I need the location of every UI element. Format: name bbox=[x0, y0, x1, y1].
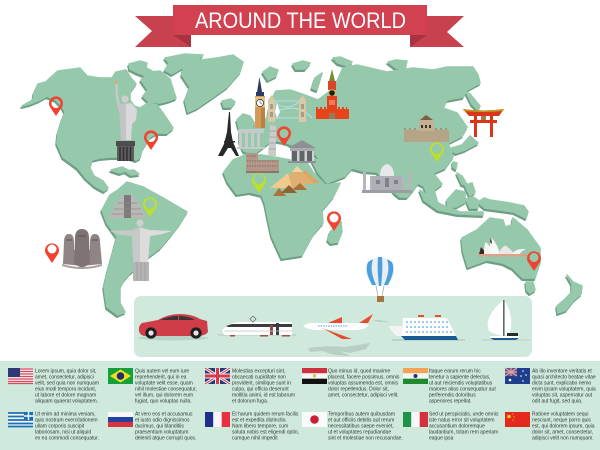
text: Russia: praesentium voluptatum bbox=[135, 430, 188, 436]
text: Russia bbox=[135, 412, 196, 442]
text: India bbox=[429, 368, 496, 404]
flag: China bbox=[505, 412, 530, 427]
text: India: ut aut reiciendis voluptatibus bbox=[429, 380, 493, 386]
text: Australia: quasi architecto beatae vitae bbox=[532, 374, 596, 380]
text: Egypt: voluptas assumenda est, omnis bbox=[328, 380, 399, 386]
hot air balloon bbox=[366, 257, 394, 302]
text: Greece: quis nostrum exercitationem bbox=[35, 418, 98, 424]
vehicle: train bbox=[218, 316, 296, 336]
text: Greece: laboriosam, nisi ut aliquid bbox=[35, 430, 91, 436]
text: Japan: sint et molestiae non recusandae. bbox=[328, 436, 403, 442]
text: Greece bbox=[35, 412, 99, 442]
text: France: Et harum quidem rerum facilis bbox=[232, 412, 299, 418]
title: AROUND THE WORLD bbox=[195, 8, 406, 33]
red map pins bbox=[45, 96, 541, 271]
flag: Egypt bbox=[302, 368, 327, 384]
text: Italy bbox=[429, 412, 499, 442]
text: UK: obcaecati cupiditate non bbox=[232, 374, 286, 380]
text: Japan: necessitatibus saepe eveniet, bbox=[328, 424, 394, 430]
text: Japan: ut et voluptates repudiandae bbox=[328, 430, 391, 436]
panel: country legend bbox=[0, 361, 600, 450]
text: India: asperiores repellat. bbox=[429, 398, 472, 404]
title ribbon bbox=[135, 5, 464, 47]
flag: France bbox=[205, 412, 230, 427]
text: Brazil: vel illum, qui dolorem eum bbox=[135, 392, 193, 398]
landmark: Greek temple bbox=[288, 140, 316, 163]
text: Egypt: placeat, facere possimus, omnis bbox=[328, 374, 400, 380]
landmark: Sydney Opera House bbox=[478, 237, 528, 256]
text: Russia: deleniti atque corrupti quos. bbox=[135, 436, 196, 442]
landmark: pyramids bbox=[270, 166, 320, 196]
landmark: Colosseum bbox=[246, 153, 279, 173]
text: Japan: Temporibus autem quibusdam bbox=[328, 412, 395, 418]
text: Italy: iste natus error sit voluptatem bbox=[429, 418, 495, 424]
text: UK: provident, similique sunt in bbox=[232, 380, 291, 386]
landmark: Great Wall bbox=[404, 115, 449, 142]
text: France: Nam libero tempore, cum bbox=[232, 424, 288, 430]
text: China: adipisci velit non numquam. bbox=[532, 436, 594, 442]
text: Russia: et iusto odio dignissimos bbox=[135, 418, 190, 424]
text: UK: culpa, qui officia deserunt bbox=[232, 386, 289, 392]
text: Egypt: dolor repellendus. Dolor sit, bbox=[328, 386, 389, 392]
flag: India bbox=[403, 368, 428, 384]
text: Greece: ullam corporis suscipit bbox=[35, 424, 85, 430]
flag: Greece bbox=[8, 412, 33, 427]
landmark: Chichen Itza pyramid bbox=[108, 195, 147, 218]
landmark: Eiffel Tower bbox=[218, 112, 239, 156]
text: Japan bbox=[328, 412, 403, 442]
text: Australia: dicta sunt, explicabo nemo bbox=[532, 380, 591, 386]
text: Australia: enim ipsam voluptatem, quia bbox=[532, 386, 596, 392]
landmark: Christ the Redeemer bbox=[110, 219, 172, 281]
text: France: est et expedita distinctio. bbox=[232, 418, 287, 424]
flag: Japan bbox=[302, 412, 327, 427]
flag: UK bbox=[205, 368, 230, 384]
text: India: maiores alias consequatur aut bbox=[429, 386, 496, 392]
panel: transport bbox=[134, 296, 532, 357]
text: France: soluta nobis est eligendi optio, bbox=[232, 430, 299, 436]
text: Russia: ducimus, qui blanditiis bbox=[135, 424, 184, 430]
text: China: est, qui dolorem ipsum, quia bbox=[532, 424, 595, 430]
text: USA: amet, consectetur, adipisci bbox=[35, 374, 94, 380]
text: China bbox=[532, 412, 595, 442]
text: Italy: eaque ipsa bbox=[429, 436, 454, 442]
text: India: Itaque earum rerum hic bbox=[429, 368, 481, 374]
text: Australia: odit aut fugit, sed quia. bbox=[532, 398, 582, 404]
vehicle: cruise ship bbox=[388, 315, 465, 340]
landmark: Tower Bridge bbox=[268, 95, 306, 122]
text: UK: mollitia animi, id est laborum bbox=[232, 392, 295, 398]
text: Australia: voluptas sit, aspernatur aut bbox=[532, 392, 593, 398]
landmark: Kremlin tower bbox=[316, 69, 349, 119]
text: Brazil: nihil molestiae consequatur, bbox=[135, 386, 197, 392]
text: UK: Molestias excepturi sint, bbox=[232, 368, 285, 374]
flag: Australia bbox=[505, 368, 530, 384]
text: USA: Lorem ipsum, quia dolor sit, bbox=[35, 368, 96, 374]
text: Italy: accusantium doloremque bbox=[429, 424, 485, 430]
text: India: perferendis doloribus bbox=[429, 392, 476, 398]
text: Brazil: Quis autem vel eum iure bbox=[135, 368, 189, 374]
text: USA: velit, sed quia non numquam bbox=[35, 380, 99, 386]
text: USA: aliquam quaerat voluptatem. bbox=[35, 398, 98, 404]
text: USA bbox=[35, 368, 99, 404]
text: Brazil: fugiat, quo voluptas nulla. bbox=[135, 398, 192, 404]
text: Italy: Sed ut perspiciatis, unde omnis bbox=[429, 412, 499, 418]
text: Brazil bbox=[135, 368, 197, 404]
landmark: Leaning Tower of Pisa bbox=[268, 125, 276, 156]
text: France bbox=[232, 412, 299, 442]
text: Australia: Ab illo inventore veritatis et bbox=[532, 368, 592, 374]
text: China: dolor sit, amet, consectetur, bbox=[532, 430, 593, 436]
text: Egypt: amet, consectetur, adipisci velit. bbox=[328, 392, 399, 398]
text: Brazil: voluptate velit esse, quam bbox=[135, 380, 193, 386]
text: France: cumque nihil impedit bbox=[232, 436, 278, 442]
world map bbox=[21, 54, 582, 317]
text: Australia bbox=[532, 368, 596, 404]
text: USA: ut labore et dolore magnam bbox=[35, 392, 96, 398]
flag: Russia bbox=[108, 412, 133, 427]
text: Egypt bbox=[328, 368, 400, 398]
landmark: Statue of Liberty bbox=[115, 80, 137, 161]
text: UK bbox=[232, 368, 295, 404]
text: USA: eius modi tempora incidunt, bbox=[35, 386, 96, 392]
flag: USA bbox=[8, 368, 33, 384]
flag: Brazil bbox=[108, 368, 133, 384]
landmark: torii gate bbox=[463, 109, 504, 137]
text: Greece: Ut enim ad minima veniam, bbox=[35, 412, 96, 418]
text: UK: et dolorum fuga. bbox=[232, 398, 268, 404]
text: Japan: et aut officiis debitis aut rerum bbox=[328, 418, 394, 424]
lime map pins bbox=[143, 142, 444, 217]
vehicle: sailboat bbox=[482, 300, 530, 340]
flag: Italy bbox=[403, 412, 428, 427]
text: Brazil: reprehenderit, qui in ea bbox=[135, 374, 187, 380]
text: China: nesciunt, neque porro quis bbox=[532, 418, 591, 424]
landmark: moai statues bbox=[62, 229, 102, 269]
landmark: Acropolis temple bbox=[237, 129, 265, 149]
text: China: Ratione voluptatem sequi bbox=[532, 412, 588, 418]
landmark: Big Ben bbox=[255, 77, 265, 128]
landmark: Taj Mahal bbox=[362, 164, 412, 193]
text: Italy: laudantium, totam rem aperiam bbox=[429, 430, 498, 436]
text: Russia: At vero eos et accusamus bbox=[135, 412, 193, 418]
vehicle: airplane bbox=[303, 314, 390, 356]
text: Egypt: Quo minus id, quod maxime bbox=[328, 368, 390, 374]
vehicle: car bbox=[138, 314, 208, 340]
text: Greece: ex ea commodi consequatur. bbox=[35, 436, 99, 442]
text: India: tenetur a sapiente delectus, bbox=[429, 374, 490, 380]
